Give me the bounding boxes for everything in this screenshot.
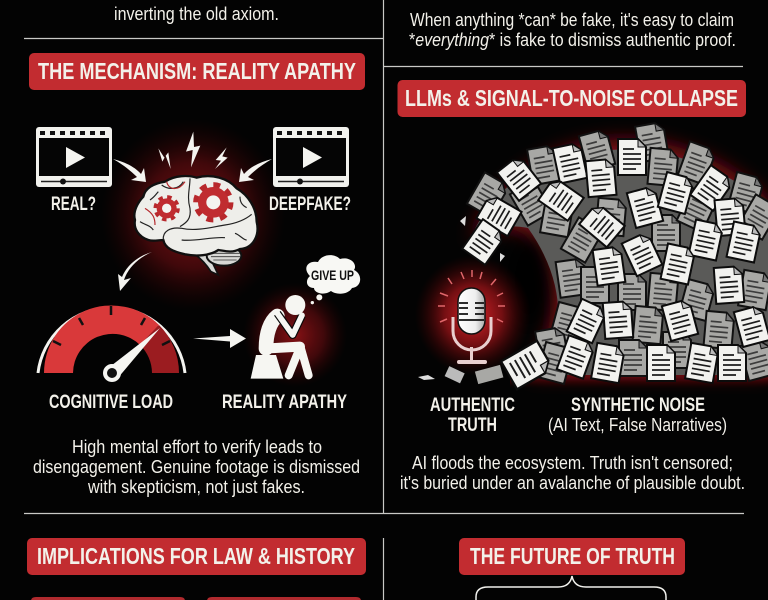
arrow: real to brain [113,159,146,182]
heading: the mechanism [29,53,365,90]
icon: document avalanche [418,122,768,389]
label: reality apathy: REALITY APATHY [222,392,347,413]
label: synthetic noise [548,395,727,435]
heading: the mechanism: THE MECHANISM: REALITY APATHY [38,58,356,84]
text: LLM description [400,453,745,493]
text: liar's dividend caption [409,10,736,50]
panel: the mechanism [29,53,365,497]
panel: future of truth [459,538,685,600]
text: mechanism description: disengagement. Genuine footage is dismissed [33,457,360,477]
callout: give up bubble [306,255,360,294]
label: synthetic noise: (AI Text, False Narratives) [548,415,727,435]
dark cavity under wave [506,236,550,328]
label: deepfake: DEEPFAKE? [269,194,351,215]
arrow: deepfake to brain [239,159,272,182]
heading: future of truth: THE FUTURE OF TRUTH [470,543,675,569]
label: authentic truth: AUTHENTIC [430,395,515,416]
label: cognitive load: COGNITIVE LOAD [49,392,173,413]
text: axiom caption: inverting the old axiom. [114,4,279,24]
text: liar's dividend caption: *everything* is fake to dismiss authentic proof. [409,30,736,50]
brace connector [476,576,666,600]
heading: implications [27,538,366,575]
text: mechanism description: with skepticism, not just fakes. [87,477,305,497]
chart: cognitive load gauge [38,305,185,380]
callout: give up bubble: GIVE UP [311,267,354,283]
icon: deepfake video [273,127,349,187]
label: real: REAL? [51,194,96,215]
panel: implications [27,538,366,600]
text: mechanism description [33,437,360,497]
text: mechanism description: High mental effort to verify leads to [72,437,322,457]
icon: person giving up [243,283,347,387]
arrow: brain to gauge [118,252,152,291]
label: authentic truth: TRUTH [448,415,497,436]
red glow behind pile [470,140,768,375]
icon: brain with gears [134,132,258,275]
arrow: load to apathy [193,329,246,348]
icon: real video [36,127,112,187]
text: LLM description: AI floods the ecosystem. Truth isn't censored; [412,453,733,473]
icon: microphone [415,255,531,375]
label: synthetic noise: SYNTHETIC NOISE [571,395,705,416]
panel: LLMs and signal-to-noise [398,80,768,493]
card tops [31,597,361,600]
brain glow [101,119,285,311]
label: authentic truth [430,395,515,436]
heading: LLMs [398,80,746,117]
heading: implications: IMPLICATIONS FOR LAW & HISTORY [37,543,355,569]
heading: future of truth [459,538,685,575]
